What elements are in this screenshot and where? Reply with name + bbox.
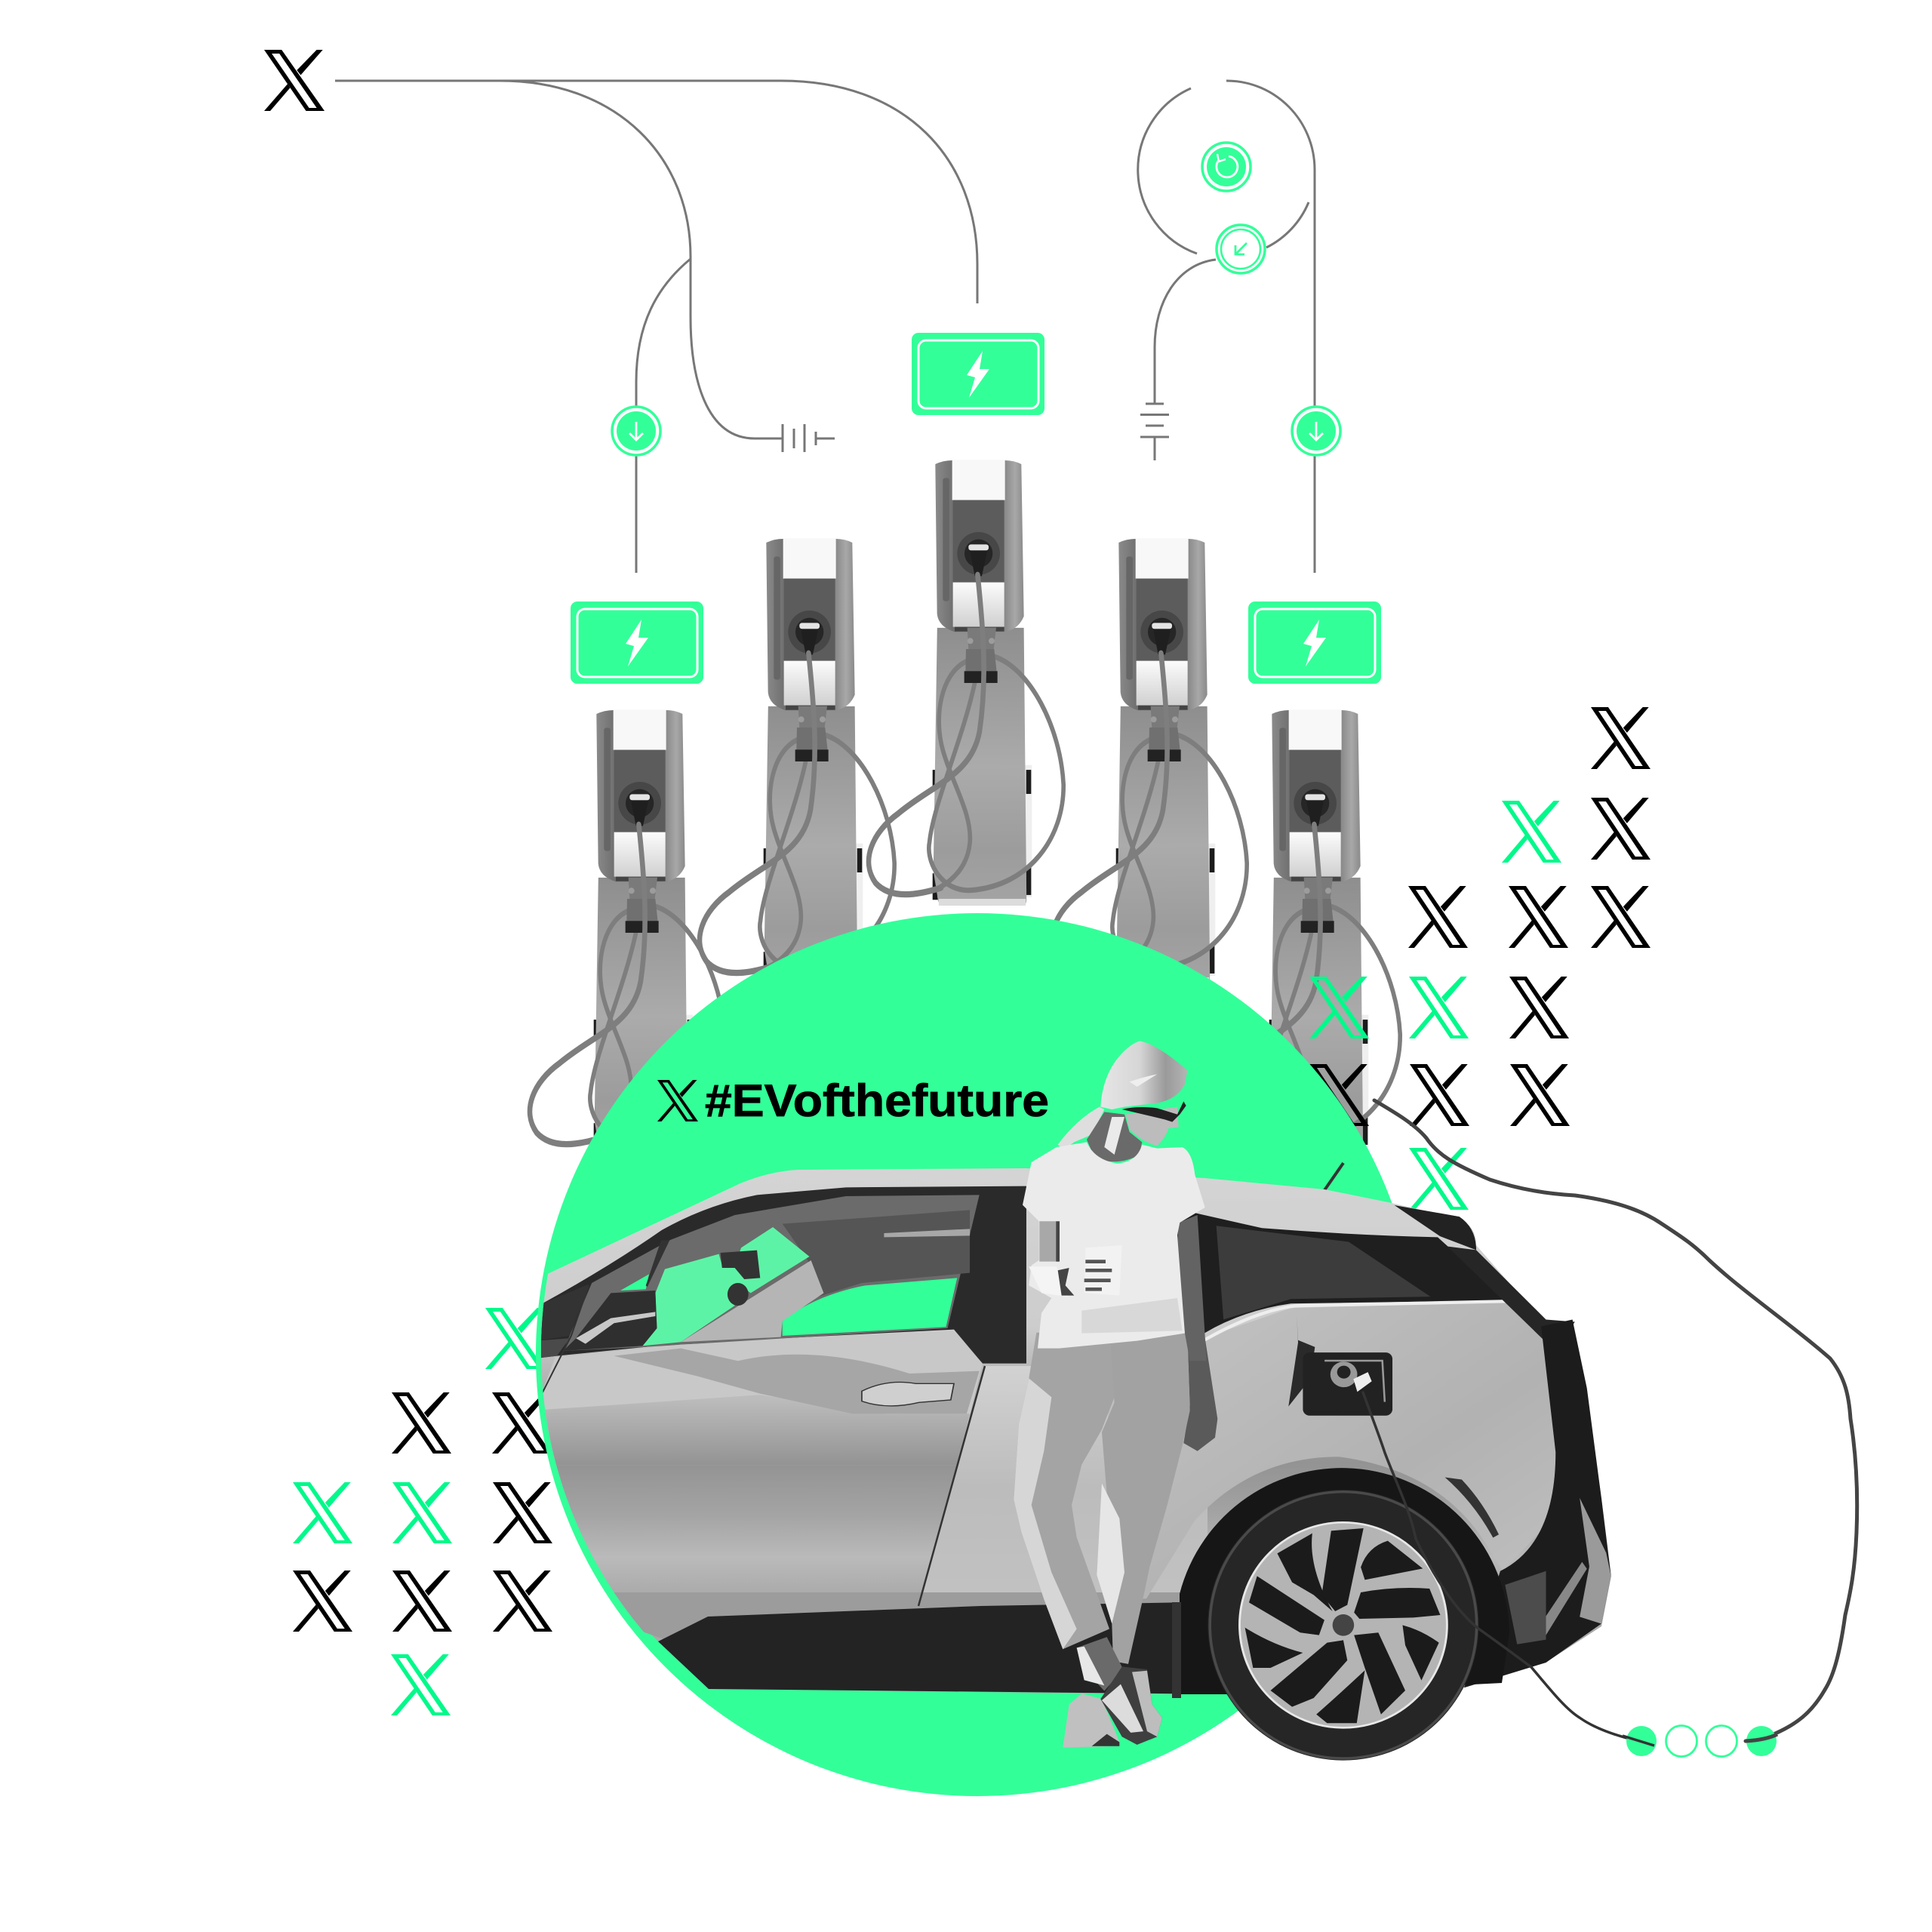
long charging cable [1374, 1100, 1857, 1741]
tail streak [1537, 1562, 1587, 1635]
face [1126, 1107, 1179, 1146]
legs [1014, 1327, 1217, 1748]
left leg [1014, 1333, 1115, 1649]
filler flap [1288, 1315, 1315, 1407]
fingers [1084, 1262, 1112, 1289]
icon: centre battery [912, 333, 1044, 415]
charger 3 (centre) [869, 460, 1063, 906]
ponytail [1058, 1107, 1104, 1149]
door seam lower [918, 1366, 985, 1606]
left wrist [1029, 1266, 1068, 1297]
icon: refresh [1202, 143, 1251, 191]
hair [1100, 1041, 1187, 1109]
hashtag heading [657, 1075, 1049, 1126]
line: logo to battery symbol [500, 81, 782, 438]
rear window [1177, 1214, 1503, 1333]
rear glass [1217, 1226, 1430, 1319]
right leg [1097, 1327, 1190, 1664]
car body [528, 1168, 1611, 1694]
right arm [1176, 1215, 1206, 1361]
door handle [862, 1382, 954, 1406]
line: loop to right battery [1226, 81, 1315, 573]
line: loop left arc [1138, 88, 1197, 254]
heading text: #EVofthefuture [705, 1075, 1049, 1126]
green through windscreen [643, 1227, 809, 1346]
rim [1239, 1522, 1447, 1727]
spoiler [1395, 1205, 1476, 1250]
rearview mirror [721, 1251, 760, 1279]
wing mirror [563, 1291, 657, 1351]
icon: right battery [1248, 601, 1381, 684]
window frame [537, 1186, 1026, 1364]
neck highlight [1104, 1117, 1124, 1155]
line: curve to vertical battery symbol [1155, 260, 1216, 404]
icon: left battery [571, 601, 703, 684]
bumper blob [1505, 1571, 1546, 1644]
green through side window [783, 1278, 957, 1336]
rear pillar edge [1447, 1247, 1575, 1352]
door lower tone [540, 1395, 970, 1466]
door seam [543, 1286, 589, 1393]
wheel [1208, 1490, 1478, 1761]
door top [538, 1331, 983, 1466]
A-post [541, 1284, 589, 1340]
tyre [1208, 1490, 1478, 1761]
car antenna [1324, 1163, 1343, 1190]
charge port [1303, 1352, 1392, 1416]
front shoe [1063, 1694, 1119, 1748]
woman [1014, 1041, 1217, 1748]
pagination dots [1623, 1725, 1777, 1757]
headliner bar [884, 1229, 970, 1237]
right arm lower and hand [1183, 1338, 1217, 1451]
small green triangle [620, 1274, 649, 1291]
wiring lines [335, 81, 1315, 573]
A-pillar [646, 1240, 669, 1287]
t-shirt [1023, 1142, 1205, 1349]
car and woman photo [528, 1041, 1611, 1761]
left leg highlight [1014, 1378, 1077, 1649]
neck [1087, 1112, 1142, 1161]
icon: X logo in heading [657, 1080, 698, 1121]
sunglasses [1122, 1101, 1186, 1122]
right leg highlight [1097, 1484, 1124, 1623]
icon: right down arrow [1292, 407, 1340, 455]
hub [1333, 1614, 1354, 1636]
icon: battery symbol vertical [1140, 404, 1169, 460]
X pattern right [1309, 707, 1651, 1210]
rear door panel [918, 1366, 1208, 1606]
car charging cable [1363, 1392, 1654, 1746]
shoulder highlight [1204, 1301, 1507, 1340]
rear body panel [1108, 1301, 1558, 1603]
window glass [563, 1195, 980, 1351]
rim pockets [1245, 1528, 1440, 1723]
rear marker [1445, 1478, 1499, 1538]
laces [1102, 1684, 1143, 1733]
infographic canvas [264, 50, 1860, 1796]
lower door band [614, 1592, 1180, 1639]
tail light [1580, 1498, 1611, 1623]
top X logo [264, 50, 325, 111]
dashboard [681, 1260, 823, 1342]
hair highlight [1130, 1074, 1157, 1087]
upper body [1023, 1041, 1206, 1361]
headliner [783, 1210, 970, 1298]
tail and bumper [1464, 1319, 1611, 1687]
icon: hollow return arrow [1217, 225, 1265, 273]
line: logo to centre battery [335, 81, 977, 303]
watch [1058, 1268, 1074, 1296]
line: loop right arc [1266, 202, 1309, 248]
charger 4 [1052, 538, 1247, 984]
front window and door details [537, 1186, 1026, 1466]
line: branch to left battery [636, 259, 691, 573]
charger 1 [530, 709, 724, 1155]
left forearm [1039, 1221, 1059, 1262]
shirt shading [1081, 1298, 1183, 1334]
charger 5 [1205, 709, 1400, 1155]
ankle [1077, 1637, 1123, 1691]
X pattern left [293, 1308, 552, 1715]
wheel arch [1180, 1468, 1509, 1694]
sill [658, 1603, 1172, 1694]
car rear section [1108, 1205, 1611, 1687]
icon: battery symbol horizontal [783, 424, 835, 452]
green circle [536, 913, 1419, 1796]
back shoe [1100, 1666, 1162, 1745]
icon: left down arrow [612, 407, 660, 455]
mud flap [1172, 1602, 1181, 1698]
mug [1084, 1245, 1122, 1296]
door shadow wedge [614, 1349, 980, 1414]
charging plug [1353, 1372, 1372, 1392]
charger 2 [700, 538, 894, 984]
